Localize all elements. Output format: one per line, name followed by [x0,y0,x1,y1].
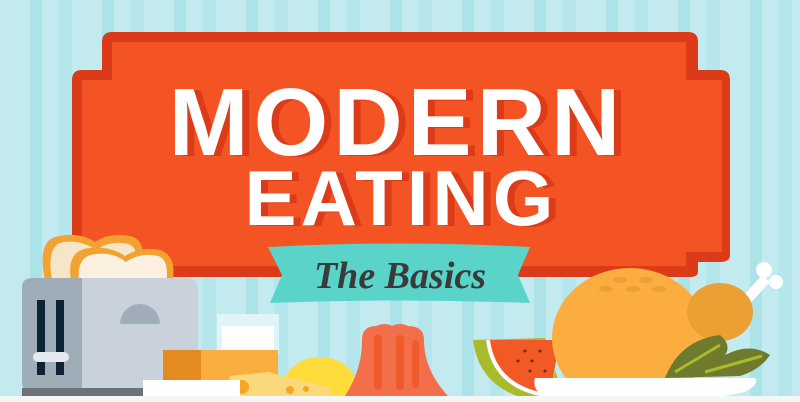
icon: watermelon [473,338,565,402]
icon: bread slices [43,235,174,285]
icon: toaster [22,278,198,402]
icon: cheese block [163,350,278,382]
ribbon: The Basics: The Basics [314,255,486,297]
icon: jello [345,324,448,396]
plate under toaster [143,380,240,402]
icon: glass of milk [217,314,279,354]
ribbon: The Basics [268,244,530,303]
title: MODERN EATING: EATING [245,154,557,242]
title: MODERN EATING: MODERN [176,70,632,177]
icon: roast chicken on plate [534,262,783,402]
icon: lemon [282,357,358,402]
sign: title banner [72,32,730,277]
title: MODERN EATING: MODERN [169,69,625,176]
title: MODERN EATING [169,69,632,243]
table [0,396,800,402]
icon: cheese wedge [226,372,334,402]
title: MODERN EATING: EATING [252,155,564,243]
